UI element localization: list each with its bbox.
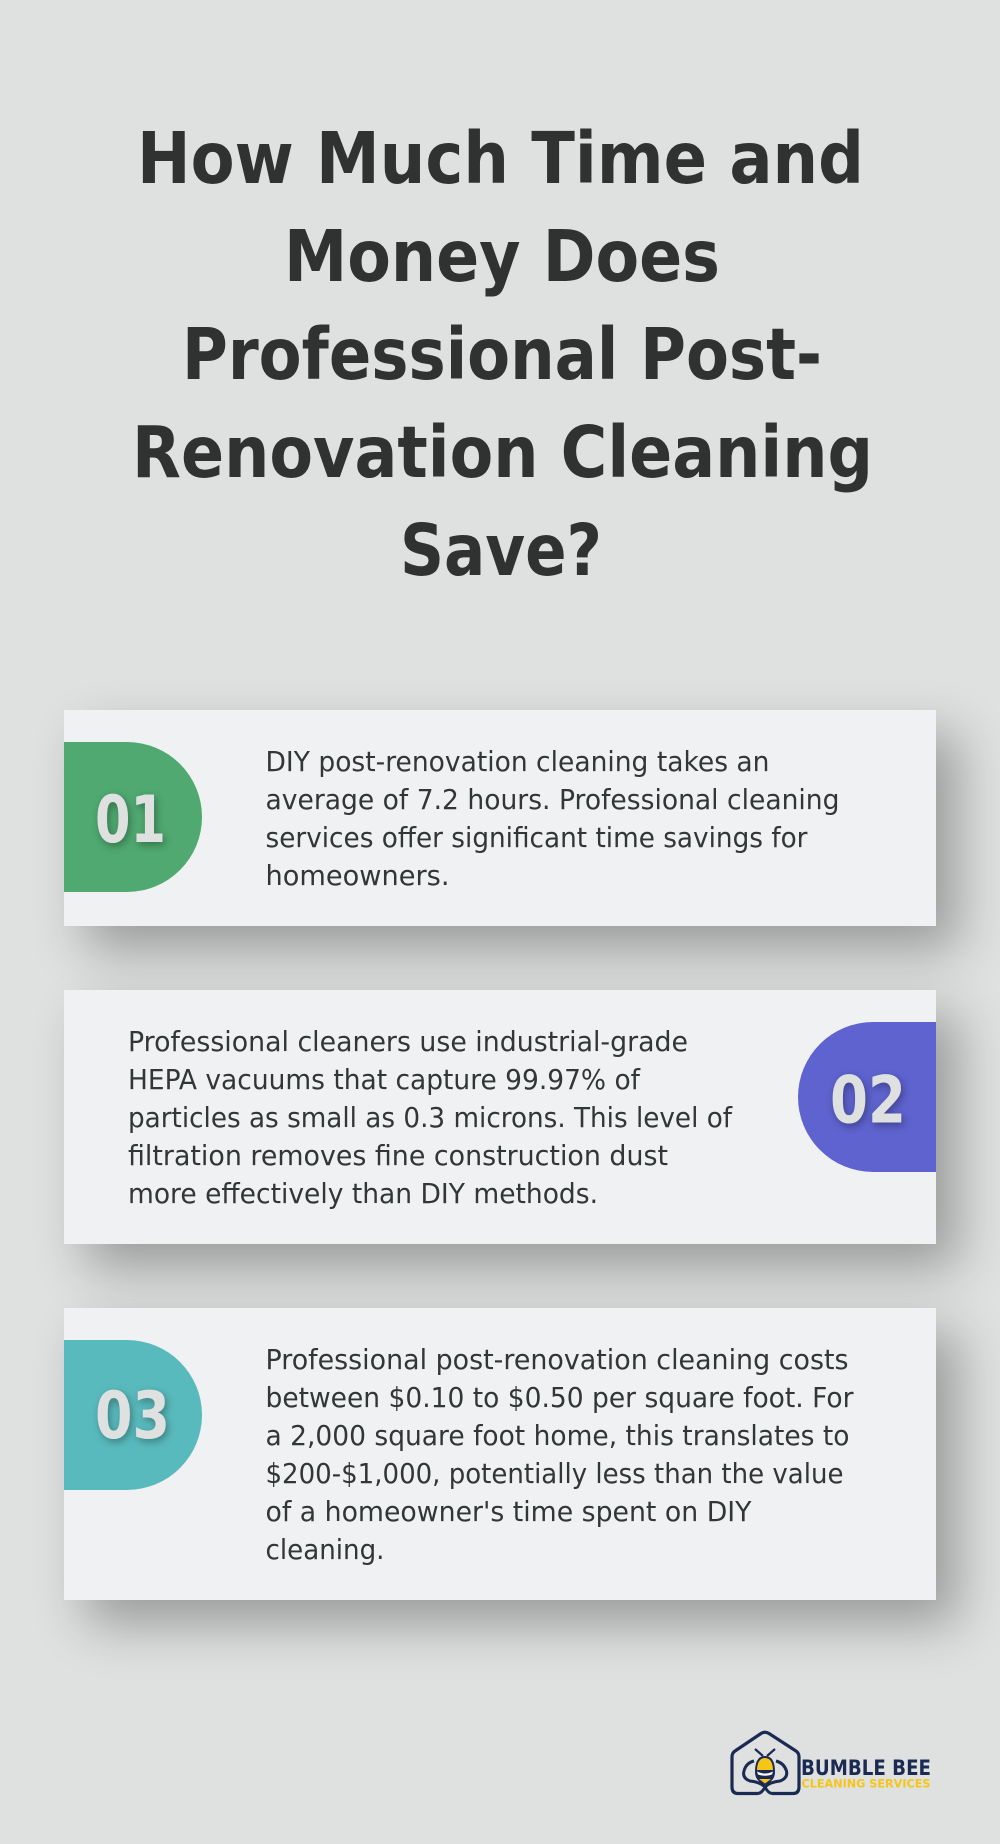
- text: card 2 body: filtration removes fine construction dust: [128, 1140, 668, 1172]
- logo: Bumble Bee Cleaning Services: BUMBLE BEE: [801, 1756, 931, 1780]
- title: How Much Time and: [137, 117, 864, 200]
- logo: Bumble Bee Cleaning Services: [730, 1730, 931, 1796]
- text: card 2 body: [128, 1026, 733, 1210]
- text: card 3 body: Professional post-renovation cleaning costs: [266, 1344, 848, 1376]
- badge: 03: [64, 1340, 202, 1490]
- panel: card 1: [64, 710, 936, 926]
- text: card 3 body: [266, 1344, 854, 1566]
- text: card 2 body: HEPA vacuums that capture 99.97% of: [128, 1064, 641, 1096]
- icon: house and bee: [732, 1732, 799, 1794]
- text: card 2 body: particles as small as 0.3 microns. This level of: [128, 1102, 733, 1134]
- badge: 01: [64, 742, 202, 892]
- logo: Bumble Bee Cleaning Services: CLEANING SERVICES: [802, 1777, 930, 1791]
- text: card 1 body: homeowners.: [266, 860, 450, 892]
- text: card 3 body: between $0.10 to $0.50 per square foot. For: [266, 1382, 854, 1414]
- text: card 1 body: average of 7.2 hours. Professional cleaning: [266, 784, 840, 816]
- badge: 03: 03: [95, 1379, 170, 1454]
- text: card 3 body: $200-$1,000, potentially less than the value: [266, 1458, 844, 1490]
- text: card 1 body: DIY post-renovation cleaning takes an: [266, 746, 770, 778]
- text: card 2 body: more effectively than DIY methods.: [128, 1178, 598, 1210]
- title: Save?: [400, 509, 602, 592]
- text: card 3 body: a 2,000 square foot home, this translates to: [266, 1420, 850, 1452]
- text: card 1 body: [266, 746, 840, 892]
- title: [132, 117, 873, 592]
- text: card 1 body: services offer significant time savings for: [266, 822, 808, 854]
- text: card 3 body: of a homeowner's time spent on DIY: [266, 1496, 752, 1528]
- badge: 01: 01: [95, 783, 166, 858]
- title: Professional Post-: [182, 313, 822, 396]
- panel: card 2: [64, 990, 936, 1244]
- badge: 02: [798, 1022, 936, 1172]
- text: card 3 body: cleaning.: [266, 1534, 384, 1566]
- title: Money Does: [284, 215, 720, 298]
- title: Renovation Cleaning: [132, 411, 873, 494]
- badge: 02: 02: [830, 1064, 906, 1139]
- panel: card 3: [64, 1308, 936, 1600]
- text: card 2 body: Professional cleaners use industrial-grade: [128, 1026, 688, 1058]
